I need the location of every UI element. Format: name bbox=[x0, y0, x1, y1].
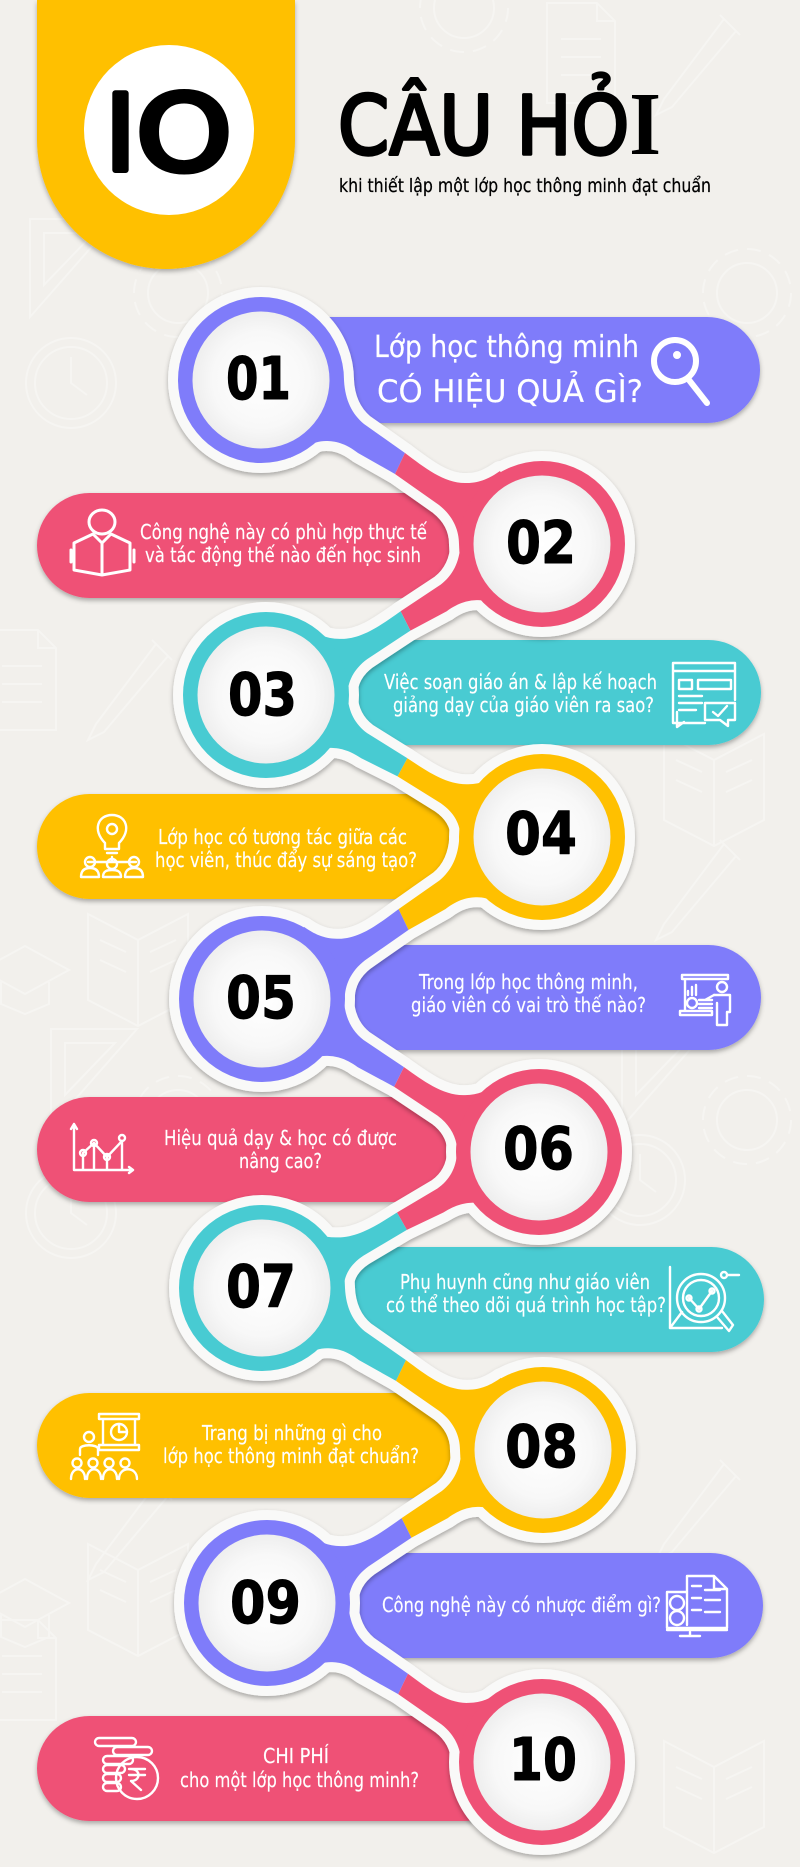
node 05: 05 bbox=[226, 963, 296, 1032]
node 08: 08 bbox=[505, 1412, 578, 1481]
icon: teacher at board bbox=[680, 975, 730, 1025]
panel: question 10: CHI PHÍ bbox=[263, 1744, 329, 1768]
node 06 bbox=[394, 1067, 622, 1235]
panel: question 01: Lớp học thông minh bbox=[374, 330, 639, 365]
panel: question 01: CÓ HIỆU QUẢ GÌ? bbox=[377, 371, 643, 410]
icon: magnifier bbox=[654, 340, 707, 403]
panel: question 03 bbox=[300, 640, 761, 745]
header badge: O bbox=[136, 73, 232, 195]
panel: question 07: Phụ huynh cũng như giáo viên bbox=[400, 1270, 650, 1294]
panel: question 06: nâng cao? bbox=[239, 1149, 322, 1173]
subtitle: khi thiết lập một lớp học thông minh đạt chuẩn bbox=[339, 175, 711, 197]
icon: line chart bbox=[71, 1124, 133, 1173]
panel: question 09 bbox=[300, 1553, 763, 1658]
node 01 bbox=[178, 297, 405, 474]
panel: question 02: Công nghệ này có phù hợp thực tế bbox=[140, 520, 428, 544]
node 09: 09 bbox=[230, 1568, 301, 1637]
icon: magnified analytics chart bbox=[670, 1267, 739, 1331]
panel: question 06: Hiệu quả dạy & học có được bbox=[164, 1126, 397, 1150]
panel: question 01 bbox=[270, 317, 760, 423]
node 05 bbox=[179, 909, 409, 1087]
node 06: 06 bbox=[503, 1114, 574, 1183]
node 08 bbox=[396, 1360, 626, 1538]
icon: coins with rupee bbox=[95, 1738, 158, 1799]
node 10 bbox=[398, 1674, 625, 1845]
panel: question 03: giảng dạy của giáo viên ra sao? bbox=[393, 693, 654, 717]
panel: question 02: và tác động thế nào đến học sinh bbox=[145, 543, 421, 567]
node 01: 01 bbox=[226, 344, 291, 413]
panel: question 08: Trang bị những gì cho bbox=[201, 1421, 382, 1445]
panel: question 08 bbox=[37, 1393, 517, 1498]
icon: person reading bbox=[71, 510, 134, 575]
icon: classroom with board bbox=[71, 1414, 139, 1479]
panel: question 09: Công nghệ này có nhược điểm gì? bbox=[382, 1593, 661, 1617]
panel: question 08: lớp học thông minh đạt chuẩn? bbox=[163, 1444, 419, 1468]
panel: question 05: Trong lớp học thông minh, bbox=[418, 970, 638, 994]
chain outline bbox=[178, 297, 626, 1845]
node 03: 03 bbox=[228, 660, 297, 729]
panel: question 04 bbox=[37, 794, 517, 899]
header badge: I bbox=[105, 73, 136, 195]
panel: question 05 bbox=[300, 945, 761, 1050]
panel: question 03: Việc soạn giáo án & lập kế hoạch bbox=[384, 670, 657, 694]
panel: question 02 bbox=[37, 493, 517, 598]
panel: question 05: giáo viên có vai trò thế nào? bbox=[411, 993, 646, 1017]
node 07 bbox=[179, 1205, 407, 1381]
node 10: 10 bbox=[509, 1725, 577, 1794]
icon: idea bulb and people bbox=[81, 815, 143, 877]
icon: computer with checklist bbox=[667, 1576, 727, 1636]
node 07: 07 bbox=[226, 1252, 296, 1321]
panel: question 07: có thể theo dõi quá trình học tập? bbox=[386, 1293, 666, 1317]
node 04: 04 bbox=[505, 799, 577, 868]
node 04 bbox=[398, 754, 625, 930]
node 09 bbox=[184, 1518, 411, 1694]
node 02 bbox=[395, 453, 625, 631]
panel: question 10 bbox=[37, 1716, 517, 1821]
panel: question 10: cho một lớp học thông minh? bbox=[180, 1768, 419, 1792]
header badge bbox=[37, 0, 295, 269]
node 03 bbox=[183, 611, 410, 778]
panel: question 04: Lớp học có tương tác giữa các bbox=[158, 825, 407, 849]
panel: question 06 bbox=[37, 1097, 512, 1202]
icon: lesson plan document bbox=[673, 663, 735, 727]
panel: question 04: học viên, thúc đẩy sự sáng tạo? bbox=[155, 848, 417, 872]
title: CÂU HỎI bbox=[338, 74, 661, 174]
panel: question 07 bbox=[300, 1247, 764, 1352]
node 02: 02 bbox=[506, 508, 576, 577]
